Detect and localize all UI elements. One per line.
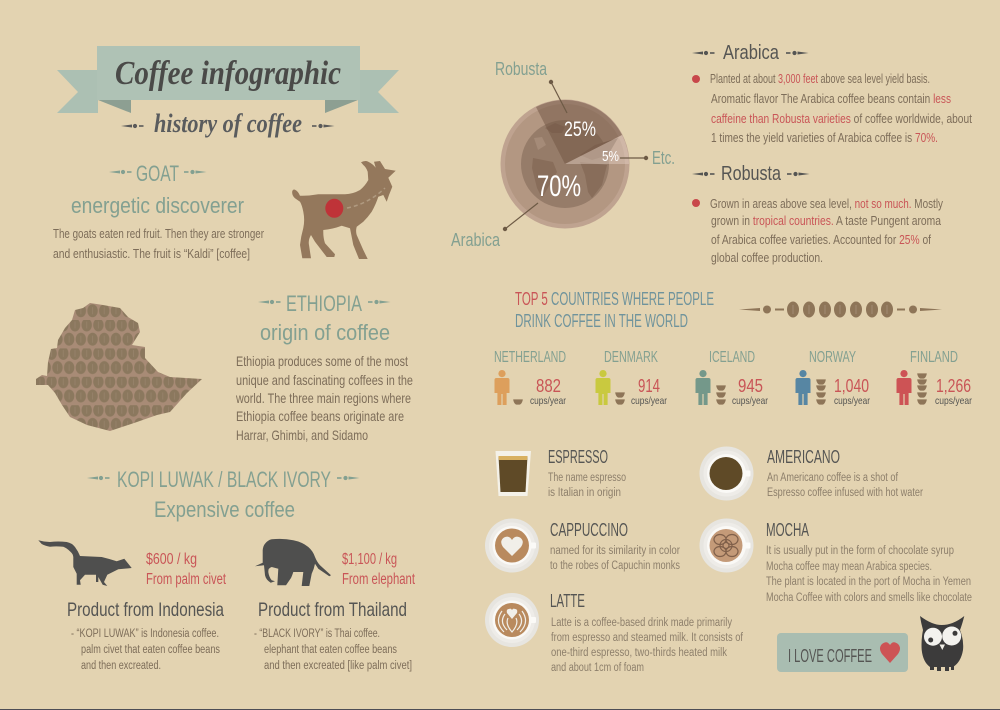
country: netherland: cups/year [530, 395, 566, 407]
text: thailand description: and then excreated [like palm civet] [264, 660, 412, 672]
heading: cappuccino: CAPPUCCINO [550, 519, 628, 540]
heading: top 5 countries [515, 289, 714, 331]
badge: i love coffee [777, 633, 908, 672]
text: cappuccino description: named for its similarity in color [550, 545, 680, 557]
country: finland [896, 349, 972, 407]
text: latte description: Latte is a coffee-based drink made primarily [551, 617, 732, 629]
price: civet coffee: From palm civet [146, 571, 226, 588]
price: civet coffee [146, 551, 226, 588]
heading: kopi luwak: KOPI LUWAK / BLACK IVORY [117, 467, 331, 492]
icon: cappuccino cup [485, 518, 539, 572]
heading: americano: AMERICANO [767, 446, 840, 467]
text: mocha description: Mocha coffee may mean Arabica species. [766, 561, 932, 573]
panel: cappuccino [485, 518, 680, 572]
text: cappuccino description: to the robes of Capuchin monks [550, 560, 680, 572]
country: iceland: cups/year [732, 395, 768, 407]
panel: goat [53, 161, 396, 261]
text: ethiopia description: Ethiopia produces some of the most [236, 353, 408, 369]
country: iceland: ICELAND [709, 349, 755, 366]
text: arabica description: Aromatic flavor The Arabica coffee beans contain less [711, 92, 951, 106]
heading: top 5 countries: DRINK COFFEE IN THE WORLD [515, 311, 688, 331]
price: elephant coffee: $1,100 / kg [342, 551, 397, 568]
text: ethiopia description [235, 353, 413, 443]
text: cappuccino description [550, 545, 680, 572]
heading: robusta [692, 162, 810, 185]
heading: arabica: Arabica [723, 41, 779, 64]
text: robusta description: global coffee production. [711, 251, 823, 265]
heading: robusta: Robusta [721, 162, 781, 185]
text: arabica description: Planted at about 3,000 feet above sea level yield basis. [710, 72, 930, 86]
text: latte description: and about 1cm of foam [551, 662, 644, 674]
heading: mocha: MOCHA [766, 519, 809, 540]
heading: product from thailand: Product from Thailand [258, 599, 407, 621]
text: robusta description: of Arabica coffee varieties. Accounted for 25% of [711, 233, 931, 247]
heading: ethiopia: ETHIOPIA [286, 291, 362, 316]
country: denmark: cups/year [631, 395, 667, 407]
text: indonesia description: - “KOPI LUWAK” is Indonesia coffee. [71, 628, 219, 640]
panel: mocha [700, 518, 972, 604]
title ribbon [57, 46, 399, 113]
text: espresso description: The name espresso [548, 472, 626, 484]
country: norway [796, 349, 870, 407]
text: goat description: The goats eaten red fruit. Then they are stronger [53, 227, 264, 241]
text: americano description: Espresso coffee infused with hot water [767, 487, 923, 499]
panel: top 5 countries [494, 289, 972, 407]
country: netherland: NETHERLAND [494, 349, 566, 366]
country: norway: cups/year [834, 395, 870, 407]
text: mocha description: It is usually put in the form of chocolate syrup [766, 545, 954, 557]
text: indonesia description: and then excreated. [81, 660, 161, 672]
text: ethiopia description: Ethiopia coffee beans originate are [236, 408, 404, 424]
text: robusta description: grown in tropical countries. A taste Pungent aroma [711, 214, 941, 228]
bullet [692, 199, 700, 207]
icon: espresso glass [496, 451, 531, 496]
text: americano description [767, 472, 923, 499]
text: espresso description: is Italian in origin [548, 487, 621, 499]
subtitle: history of coffee [154, 109, 302, 138]
text: ethiopia description: unique and fascinating coffees in the [236, 372, 413, 388]
bullet [692, 75, 700, 83]
pie values: 25% [564, 118, 596, 141]
divider: coffee bean ornament [739, 302, 942, 318]
price: elephant coffee [342, 551, 415, 588]
text: ethiopia description: world. The three main regions where [235, 390, 411, 406]
text: latte description [551, 617, 744, 674]
globe continents [532, 123, 618, 198]
price: civet coffee: $600 / kg [146, 551, 197, 568]
heading: espresso: ESPRESSO [548, 446, 608, 467]
country: finland: cups/year [935, 395, 972, 407]
text: americano description: An Americano coffee is a shot of [767, 472, 899, 484]
pie values: 70% [537, 170, 581, 203]
pie labels [451, 58, 675, 250]
country: finland: 1,266 [936, 375, 971, 396]
heading: product from indonesia: Product from Indonesia [67, 599, 224, 621]
badge: i love coffee: I LOVE COFFEE [788, 645, 872, 666]
icon: owl [920, 616, 964, 671]
country: denmark [596, 349, 667, 407]
subheading: origin of coffee: origin of coffee [260, 320, 390, 345]
icon: palm civet [38, 540, 132, 586]
text: goat description [53, 227, 264, 261]
country: iceland [696, 349, 768, 407]
country: iceland: 945 [738, 375, 763, 396]
panel: americano [700, 446, 923, 500]
text: goat description: and enthusiastic. The fruit is “Kaldi” [coffee] [53, 247, 250, 261]
panel: latte [485, 590, 744, 674]
icon: elephant [255, 539, 331, 586]
text: espresso description [548, 472, 626, 499]
country: netherland: 882 [536, 375, 561, 396]
country: norway: 1,040 [834, 375, 869, 396]
panel: espresso [496, 446, 626, 499]
icon: americano cup [700, 446, 754, 500]
text: arabica description [710, 72, 972, 145]
panel: kopi luwak and black ivory [38, 467, 415, 672]
country: norway: NORWAY [809, 349, 856, 366]
text: indonesia description: palm civet that eaten coffee beans [81, 644, 220, 656]
heading: goat [109, 161, 206, 186]
icon: heart [880, 642, 900, 663]
price: elephant coffee: From elephant [342, 571, 415, 588]
country: finland: FINLAND [910, 349, 958, 366]
text: thailand description [254, 628, 412, 672]
subheading: expensive coffee: Expensive coffee [154, 497, 295, 522]
map: ethiopia filled with coffee beans [36, 303, 202, 431]
pie values [537, 118, 619, 203]
country: denmark: 914 [638, 375, 660, 396]
country: netherland [494, 349, 566, 407]
text: latte description: one-third espresso, two-thirds heated milk [551, 647, 727, 659]
panel: arabica [692, 41, 972, 145]
panel: ethiopia [36, 291, 413, 443]
heading: goat: GOAT [136, 161, 179, 186]
text: indonesia description [71, 628, 220, 672]
subheading: energetic discoverer: energetic discoverer [71, 193, 244, 218]
text: robusta description [710, 197, 944, 265]
icon: mocha cup [700, 518, 754, 572]
pie values: 5% [602, 148, 619, 165]
heading: top 5 countries: TOP 5 COUNTRIES WHERE PEOPLE [515, 289, 714, 309]
title: Coffee infographic [115, 55, 341, 92]
icon: latte cup [485, 593, 539, 647]
heading: arabica [692, 41, 808, 64]
text: thailand description: - “BLACK IVORY” is Thai coffee. [254, 628, 380, 640]
text: thailand description: elephant that eaten coffee beans [264, 644, 397, 656]
icon: goat with red fruit [292, 161, 396, 259]
text: arabica description: 1 times the yield varieties of Arabica coffee is 70%. [711, 131, 938, 145]
pie labels: Etc. [652, 147, 675, 168]
heading: latte: LATTE [550, 590, 585, 611]
pie labels: Robusta [495, 58, 548, 79]
text: ethiopia description: Harrar, Ghimbi, and Sidamo [236, 427, 368, 443]
text: latte description: from espresso and steamed milk. It consists of [551, 632, 744, 644]
text: arabica description: caffeine than Robusta varieties of coffee worldwide, about [711, 112, 972, 126]
text: robusta description: Grown in areas above sea level, not so much. Mostly [710, 197, 944, 211]
pie labels: Arabica [451, 229, 501, 250]
country: denmark: DENMARK [604, 349, 658, 366]
chart: coffee variety pie on globe [451, 58, 675, 250]
text: mocha description [766, 545, 972, 604]
panel: robusta [692, 162, 944, 265]
leader lines [503, 80, 648, 231]
